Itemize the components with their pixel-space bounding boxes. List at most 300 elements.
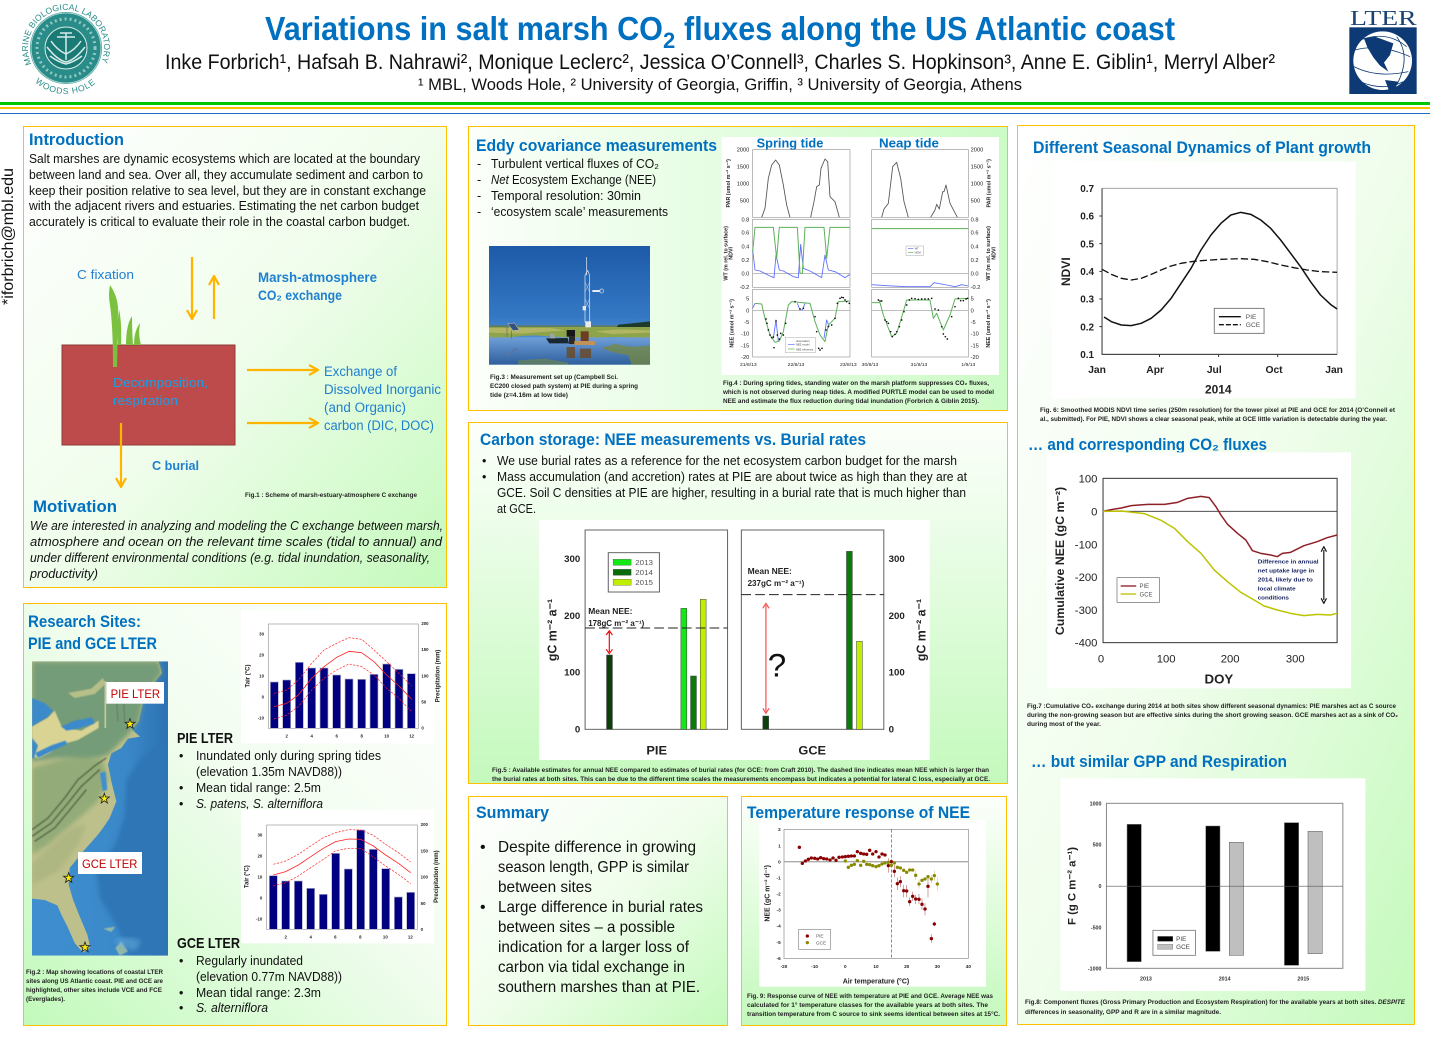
chart: GPP and respiration bars: 1000 bbox=[1090, 801, 1102, 807]
chart: spring and neap tide time series bbox=[722, 136, 999, 375]
heading: spring tide: Spring tide bbox=[757, 136, 823, 151]
list: summary points: between sites – a possible bbox=[498, 919, 675, 936]
list: eddy covariance facts: ‘ecosystem scale’ measurements bbox=[491, 205, 668, 219]
logo: LTER bbox=[1349, 8, 1417, 94]
label: GCE LTER bbox=[78, 852, 142, 874]
chart: spring and neap tide time series: 0.4 bbox=[741, 244, 749, 250]
text: motivation: under different environmental conditions (e.g. tidal inundation, seasonality, bbox=[30, 551, 430, 565]
heading: carbon storage: Carbon storage: NEE measurements vs. Burial rates bbox=[480, 431, 866, 449]
chart: GCE climate diagram: 200 bbox=[421, 822, 428, 827]
label: decomposition: respiration bbox=[113, 393, 178, 408]
caption: figure 3: Fig.3 : Measurement set up (Campbell Sci. bbox=[490, 374, 618, 381]
chart: GCE climate diagram: Precipitation (mm) bbox=[434, 850, 440, 903]
label: marsh-atmosphere exchange bbox=[258, 270, 377, 303]
text: GCE LTER site description: S. alterniflora bbox=[196, 1001, 268, 1015]
label: C burial: C burial bbox=[152, 458, 199, 473]
chart: NEE vs burial rates: 100 bbox=[889, 668, 905, 679]
chart: PIE climate diagram: 6 bbox=[335, 733, 338, 738]
chart: GPP and respiration bars: -1000 bbox=[1088, 966, 1102, 972]
label: decomposition bbox=[113, 375, 208, 408]
chart: spring and neap tide time series: WT (m rel. to surface) bbox=[986, 226, 992, 281]
icon: site stars bbox=[64, 719, 135, 952]
heading: CO2 fluxes: … and corresponding CO₂ fluxes bbox=[1028, 436, 1267, 454]
caption: figure 1: Fig.1 : Scheme of marsh-estuary-atmosphere C exchange bbox=[245, 492, 417, 499]
chart: spring and neap tide time series: -20 bbox=[741, 355, 749, 361]
authors: Inke Forbrich¹, Hafsah B. Nahrawi², Monique Leclerc², Jessica O’Connell³, Charles S. Hopkinson³, Anne E. Giblin¹, Merryl Alber² bbox=[165, 51, 1275, 74]
heading: research sites: PIE and GCE LTER bbox=[28, 635, 157, 653]
logo: LTER: LTER bbox=[1350, 8, 1417, 30]
chart: PIE climate diagram: 150 bbox=[421, 647, 429, 652]
chart: NDVI time series: Oct bbox=[1265, 365, 1283, 376]
chart: GCE climate diagram: 2 bbox=[284, 934, 287, 939]
heading: research sites: Research Sites: bbox=[28, 613, 141, 631]
list: summary points: indication for a larger loss of bbox=[498, 939, 690, 956]
caption: figure 8: differences in seasonality, GPP and R are in a similar magnitude. bbox=[1025, 1009, 1221, 1016]
chart: GCE climate diagram: 10 bbox=[258, 874, 263, 879]
caption: figure 7: during the non-growing season but are effective sinks during the short growing season. GCE marshes act as a sink of CO₂ bbox=[1027, 712, 1398, 719]
chart: cumulative NEE: -400 bbox=[1075, 638, 1097, 650]
logo: Marine Biological Laboratory seal bbox=[22, 4, 110, 94]
chart: NEE vs burial rates: 100 bbox=[564, 668, 580, 679]
legend: sites: PIE bbox=[1140, 584, 1149, 590]
caption: figure 9: calculated for 1° temperature classes for the available years at both sites. The bbox=[747, 1001, 988, 1009]
caption: figure 2 bbox=[26, 969, 163, 1003]
chart: cumulative NEE: DOY bbox=[1205, 672, 1233, 687]
chart: NEE vs air temperature: 0 bbox=[778, 859, 781, 864]
chart: NDVI time series: NDVI bbox=[1059, 257, 1073, 286]
text: introduction: with the adjacent rivers and estuaries. Estimating the net carbon budget bbox=[28, 199, 420, 213]
chart: spring and neap tide time series: 2000 bbox=[737, 148, 749, 154]
list: summary points: Despite difference in growing bbox=[498, 839, 696, 856]
text: PIE LTER site description: PIE LTER bbox=[177, 730, 233, 747]
chart: PIE climate diagram: 2 bbox=[285, 733, 288, 738]
label: dissolved carbon exchange: Exchange of bbox=[324, 364, 397, 379]
label: dissolved carbon exchange: carbon (DIC, DOC) bbox=[324, 418, 434, 433]
chart: NEE vs burial rates: GCE bbox=[798, 744, 826, 757]
chart: GCE climate diagram: 150 bbox=[421, 848, 428, 853]
list: eddy covariance facts: - bbox=[477, 189, 481, 203]
chart: spring and neap tide time series: NEE (umol m⁻² s⁻¹) bbox=[729, 299, 735, 348]
label: PIE mean NEE: Mean NEE: bbox=[588, 606, 632, 616]
annotation: difference in uptake: net uptake large in bbox=[1258, 568, 1314, 574]
chart: NDVI time series: 2014 bbox=[1205, 383, 1232, 397]
legend: time series: observation bbox=[796, 339, 810, 343]
chart: spring and neap tide time series: PAR (umol m⁻² s⁻¹) bbox=[987, 159, 993, 208]
list: summary points: carbon via tidal exchange in bbox=[498, 959, 685, 976]
label: marsh-atmosphere exchange: Marsh-atmosphere bbox=[258, 270, 377, 285]
chart: spring and neap tide time series: -15 bbox=[741, 343, 749, 349]
list: eddy covariance facts: - bbox=[477, 157, 481, 171]
chart: cumulative NEE: 200 bbox=[1221, 653, 1240, 665]
list: carbon storage facts: We use burial rates as a reference for the net ecosystem carbon budget for the marsh bbox=[497, 454, 957, 468]
legend: time series: WT bbox=[915, 247, 919, 251]
line: PIE NDVI bbox=[1104, 212, 1337, 326]
chart: NEE vs burial rates: 0 bbox=[889, 725, 894, 736]
chart: NEE vs burial rates: 300 bbox=[564, 554, 580, 565]
arrow: lateral export 2 bbox=[247, 418, 318, 428]
arrow: burial bbox=[116, 423, 126, 487]
chart: NEE vs air temperature: -6 bbox=[777, 956, 781, 961]
chart: NDVI time series: 0.4 bbox=[1080, 267, 1095, 278]
chart: spring and neap tide time series: 500 bbox=[971, 198, 980, 204]
heading: GPP and respiration: … but similar GPP and Respiration bbox=[1031, 753, 1287, 771]
chart: NEE vs air temperature: 10 bbox=[873, 964, 879, 969]
caption: figure 4: NEE and estimate the flux reduction during tidal inundation (Forbrich & Giblin 2015). bbox=[723, 398, 979, 405]
label: dissolved carbon exchange bbox=[324, 364, 441, 433]
panel: temperature response bbox=[742, 796, 1006, 1026]
chart: GCE climate diagram: 4 bbox=[309, 934, 312, 939]
list: carbon storage facts: at GCE. bbox=[497, 502, 536, 516]
label: GCE mean NEE: 237gC m⁻² a⁻¹) bbox=[748, 578, 804, 588]
chart: PIE climate diagram bbox=[241, 610, 441, 743]
caption: figure 6 bbox=[1040, 407, 1396, 423]
list: summary points: Large difference in burial rates bbox=[498, 899, 703, 916]
chart: NDVI time series: Jan bbox=[1325, 365, 1343, 376]
list: summary points: • bbox=[480, 899, 486, 916]
text: GCE LTER site description: (elevation 0.77m NAVD88)) bbox=[196, 970, 342, 984]
title: Variations in salt marsh CO bbox=[265, 10, 663, 47]
legend: sites: GCE bbox=[1176, 944, 1190, 951]
list: carbon storage facts bbox=[482, 454, 968, 516]
caption: figure 9: Fig. 9: Response curve of NEE with temperature at PIE and GCE. Average NEE was bbox=[747, 993, 993, 1000]
chart: NDVI time series: 0.3 bbox=[1080, 295, 1095, 306]
chart: GCE climate diagram: 10 bbox=[383, 934, 388, 939]
chart: NEE vs air temperature: 0 bbox=[844, 964, 847, 969]
chart: spring and neap tide time series: -10 bbox=[971, 332, 979, 338]
chart: PIE climate diagram: 10 bbox=[259, 673, 265, 678]
chart: NEE vs air temperature bbox=[759, 820, 986, 987]
bars: PIE bbox=[607, 599, 706, 729]
legend: sites bbox=[799, 929, 831, 949]
text: introduction: between land and sea. Over all, they accumulate sediment and carbon to bbox=[29, 168, 423, 182]
text: motivation bbox=[29, 519, 443, 581]
panel: carbon storage bbox=[468, 422, 1008, 784]
list: carbon storage facts: • bbox=[482, 470, 486, 484]
legend: years: 2015 bbox=[635, 578, 654, 587]
line: GCE NDVI bbox=[1102, 259, 1337, 280]
chart: GCE climate diagram: 100 bbox=[421, 875, 428, 880]
panel: introduction and motivation bbox=[24, 126, 446, 588]
caption: figure 2: highlighted, other sites include VCE and FCE bbox=[26, 987, 163, 994]
caption: figure 2: Fig.2 : Map showing locations of coastal LTER bbox=[26, 969, 163, 976]
caption: figure 3: EC200 closed path system) at PIE during a spring bbox=[490, 383, 638, 390]
chart: spring and neap tide time series: 1000 bbox=[737, 181, 749, 187]
chart: NEE vs burial rates: 300 bbox=[889, 554, 905, 565]
text: motivation: productivity) bbox=[29, 567, 98, 581]
text: GCE LTER site description: Regularly inundated bbox=[196, 954, 303, 968]
map: US Atlantic coast with LTER sites bbox=[32, 661, 168, 956]
chart: NEE vs air temperature: -3 bbox=[777, 908, 781, 913]
chart: NEE vs air temperature: 1 bbox=[778, 843, 781, 848]
icon: marsh grass bbox=[109, 285, 141, 367]
lakes region bbox=[32, 711, 99, 759]
heading: temperature response: Temperature response of NEE bbox=[747, 804, 970, 822]
chart: GCE climate diagram: 6 bbox=[334, 934, 337, 939]
caption: figure 7: during most of the year. bbox=[1027, 721, 1101, 728]
caption: figure 7 bbox=[1027, 703, 1398, 728]
chart: NEE vs air temperature: -2 bbox=[777, 892, 781, 897]
chart: spring and neap tide time series: PAR (umol m⁻² s⁻¹) bbox=[726, 159, 732, 208]
tower bbox=[585, 257, 590, 322]
chart: GPP and respiration bars: 2013 bbox=[1140, 976, 1152, 982]
chart: GCE climate diagram: -10 bbox=[256, 916, 263, 921]
islands bbox=[103, 927, 128, 956]
chart: spring and neap tide time series: 1000 bbox=[971, 181, 983, 187]
chart: GCE climate diagram: 20 bbox=[258, 853, 263, 858]
chart: spring and neap tide time series: -15 bbox=[971, 343, 979, 349]
chart: spring and neap tide time series: 0.6 bbox=[971, 231, 979, 237]
caption: figure 8: Fig.8: Component fluxes (Gross Primary Production and Ecosystem Respiration) for the available years at both sites. DESPITE bbox=[1025, 999, 1406, 1006]
label: decomposition: Decomposition, bbox=[113, 375, 208, 390]
chart: NEE vs burial rates: gC m⁻² a⁻¹ bbox=[914, 599, 929, 661]
text: introduction bbox=[28, 152, 426, 229]
annotation: difference in uptake: Difference in annual bbox=[1258, 559, 1319, 565]
caption: figure 2: sites along US Atlantic coast. PIE and GCE are bbox=[26, 978, 163, 985]
affiliations: ¹ MBL, Woods Hole, ² University of Georgia, Griffin, ³ University of Georgia, Athens bbox=[418, 75, 1022, 94]
heading: summary: Summary bbox=[476, 804, 550, 822]
chart: NEE vs air temperature: NEE (gC m⁻² d⁻¹) bbox=[764, 865, 771, 922]
chart: GCE climate diagram bbox=[241, 809, 440, 943]
bars: GCE bbox=[1229, 831, 1322, 955]
caption: figure 6: al., submitted). For PIE, NDVI shows a clear seasonal peak, while at GCE little variation is detectable during the year. bbox=[1040, 416, 1387, 423]
text: PIE LTER site description: • bbox=[179, 781, 183, 795]
legend: years: 2014 bbox=[635, 568, 654, 577]
list: summary points: season length, GPP is similar bbox=[498, 859, 690, 876]
chart: spring and neap tide time series: 0 bbox=[971, 308, 974, 314]
chart: cumulative NEE: -300 bbox=[1075, 605, 1097, 617]
chart: PIE climate diagram: 30 bbox=[259, 631, 265, 636]
caption: figure 9: transition temperature from C source to sink seems identical between sites at 15°C. bbox=[747, 1010, 1000, 1018]
legend: sites: PIE bbox=[1176, 936, 1186, 943]
label: PIE mean NEE bbox=[588, 606, 644, 628]
list: carbon storage facts: • bbox=[482, 454, 486, 468]
bars: PIE bbox=[1127, 823, 1299, 965]
line: GCE cumulative NEE bbox=[1103, 511, 1337, 616]
chart: spring and neap tide time series: 0.6 bbox=[741, 231, 749, 237]
chart: GCE climate diagram: 30 bbox=[258, 832, 263, 837]
list: carbon storage facts: Mass accumulation (and accretion) rates at PIE are about twice as high than they are at bbox=[497, 470, 968, 484]
caption: figure 5: Fig.5 : Available estimates for annual NEE compared to estimates of burial rates (for GCE: from Craft 2010). The dashed line indicates mean NEE which is larger than bbox=[492, 767, 989, 774]
chart: NEE vs burial rates: gC m⁻² a⁻¹ bbox=[545, 599, 559, 661]
text: GCE LTER site description bbox=[177, 935, 342, 1015]
chart: NEE vs air temperature: 40 bbox=[966, 964, 971, 969]
caption: figure 8 bbox=[1025, 999, 1406, 1016]
chart: GCE climate diagram: 8 bbox=[359, 934, 362, 939]
annotation: difference in uptake bbox=[1258, 559, 1319, 601]
list: eddy covariance facts bbox=[477, 157, 668, 219]
arrow: CO2 up bbox=[209, 276, 219, 319]
title: fluxes along the US Atlantic coast bbox=[684, 10, 1175, 47]
chart: spring and neap tide time series: -10 bbox=[741, 332, 749, 338]
legend: time series: NEE model bbox=[796, 343, 810, 347]
label: PIE mean NEE: 178gC m⁻² a⁻¹) bbox=[588, 618, 644, 628]
chart: PIE climate diagram: 12 bbox=[409, 733, 415, 738]
caption: figure 7: Fig.7 :Cumulative CO₂ exchange during 2014 at both sites show different seasonal dynamics: PIE marshes act as C source bbox=[1027, 703, 1396, 710]
text: PIE LTER site description: Mean tidal range: 2.5m bbox=[196, 781, 321, 795]
arrow: GCE difference bbox=[763, 603, 769, 713]
text: PIE LTER site description: • bbox=[179, 797, 183, 811]
text: PIE LTER site description: • bbox=[179, 749, 183, 763]
chart: spring and neap tide time series: -20 bbox=[971, 355, 979, 361]
boat and platform bbox=[546, 338, 569, 343]
chart: GCE climate diagram: Tair (°C) bbox=[244, 865, 250, 888]
chart: spring and neap tide time series: NEE (umol m⁻² s⁻¹) bbox=[986, 299, 992, 348]
legend: sites: GCE bbox=[816, 940, 826, 945]
arrow: PIE difference bbox=[606, 631, 612, 654]
chart: GPP and respiration bars bbox=[1061, 778, 1365, 991]
annotation: difference in uptake: 2014, likely due to bbox=[1258, 577, 1314, 583]
chart: spring and neap tide time series: 23/8/13 bbox=[840, 362, 857, 368]
chart: cumulative NEE: Cumulative NEE (gC m⁻²) bbox=[1053, 487, 1067, 635]
chart: NEE vs burial rates: 200 bbox=[564, 611, 580, 622]
text: introduction: Salt marshes are dynamic ecosystems which are located at the boundary bbox=[29, 152, 421, 166]
text: GCE LTER site description: • bbox=[179, 986, 183, 1000]
label: dissolved carbon exchange: (and Organic) bbox=[324, 400, 406, 415]
chart: spring and neap tide time series: NDVI bbox=[729, 246, 735, 260]
chart: NEE vs air temperature: -20 bbox=[781, 964, 788, 969]
heading: seasonal dynamics: Different Seasonal Dynamics of Plant growth bbox=[1033, 139, 1371, 157]
panel: seasonal dynamics column bbox=[1018, 126, 1414, 1024]
text: PIE LTER site description bbox=[177, 730, 381, 811]
chart: PIE climate diagram: 4 bbox=[310, 733, 313, 738]
caption: figure 5 bbox=[492, 767, 990, 783]
legend: time series: NDVI bbox=[915, 250, 921, 254]
chart: spring and neap tide time series: 0.4 bbox=[971, 244, 979, 250]
chart: NDVI time series bbox=[1052, 162, 1356, 398]
text: GCE LTER site description: • bbox=[179, 1001, 183, 1015]
panel: eddy covariance measurements bbox=[468, 126, 1008, 410]
caption: figure 3 bbox=[490, 374, 638, 399]
caption: figure 6: Fig. 6: Smoothed MODIS NDVI time series (250m resolution) for the tower pixel at PIE and GCE for 2014 (O’Connell et bbox=[1040, 407, 1396, 414]
label: GCE mean NEE: Mean NEE: bbox=[748, 566, 792, 576]
Appalachian ridges bbox=[32, 758, 106, 841]
arrow: CO2 down bbox=[187, 257, 197, 319]
chart: NEE vs air temperature: Air temperature (°C) bbox=[843, 977, 909, 985]
chart: NDVI time series: Jul bbox=[1207, 365, 1222, 376]
caption: figure 4 bbox=[722, 380, 994, 405]
logo: Marine Biological Laboratory seal: WOODS HOLE bbox=[36, 78, 96, 94]
chart: spring and neap tide time series: -5 bbox=[971, 320, 976, 326]
ocean shelf edge bbox=[96, 736, 168, 956]
chart: spring and neap tide time series: 21/8/13 bbox=[740, 362, 757, 368]
chart: PIE climate diagram: 20 bbox=[259, 652, 265, 657]
bars: GCE bbox=[763, 551, 862, 729]
chart: cumulative NEE bbox=[1047, 452, 1351, 688]
chart: PIE climate diagram: Tair (°C) bbox=[245, 665, 251, 687]
question mark: ? bbox=[768, 647, 786, 684]
chart: GPP and respiration bars: F (g C m⁻² a⁻¹) bbox=[1067, 847, 1079, 925]
panel: summary bbox=[468, 796, 728, 1026]
chart: spring and neap tide time series: 1/9/13 bbox=[961, 362, 975, 368]
chart: spring and neap tide time series: 0.2 bbox=[741, 258, 749, 264]
chart: cumulative NEE: 100 bbox=[1079, 473, 1097, 485]
chart: spring and neap tide time series: -0.2 bbox=[971, 285, 980, 291]
chart: NEE vs air temperature: 2 bbox=[778, 827, 781, 832]
heading: neap tide: Neap tide bbox=[879, 136, 939, 151]
text: GCE LTER site description: • bbox=[179, 954, 183, 968]
legend: sites bbox=[1214, 308, 1264, 333]
Chesapeake bay bbox=[100, 771, 107, 791]
title: 2 bbox=[663, 28, 675, 53]
land mass bbox=[32, 661, 162, 953]
chart: spring and neap tide time series: 5 bbox=[971, 297, 974, 303]
legend: sites: PIE bbox=[816, 934, 824, 939]
title bbox=[265, 10, 1175, 53]
chart: NEE vs air temperature: 20 bbox=[904, 964, 910, 969]
chart: GPP and respiration bars: 500 bbox=[1093, 843, 1102, 849]
list: summary points: between sites bbox=[498, 879, 592, 896]
chart: spring and neap tide time series: -5 bbox=[744, 320, 749, 326]
text: motivation: atmosphere and ocean on the relevant time scales (tidal to annual) and bbox=[30, 535, 443, 549]
chart: GPP and respiration bars: 2014 bbox=[1219, 976, 1231, 982]
chart: spring and neap tide time series: 0.8 bbox=[971, 217, 979, 223]
chart: NEE vs air temperature: -10 bbox=[811, 964, 818, 969]
annotation: difference in uptake: local climate bbox=[1258, 586, 1296, 592]
list: carbon storage facts: GCE. Soil C densities at PIE are higher, resulting in a burial rate that is much higher than bbox=[497, 486, 966, 500]
heading: introduction: Introduction bbox=[29, 131, 124, 149]
chart: spring and neap tide time series: 500 bbox=[740, 198, 749, 204]
label: PIE LTER: PIE LTER bbox=[111, 687, 160, 701]
chart: cumulative NEE: 0 bbox=[1098, 653, 1104, 665]
list: eddy covariance facts: Temporal resolution: 30min bbox=[491, 189, 641, 203]
chart: spring and neap tide time series: 0.0 bbox=[971, 271, 979, 277]
caption: figure 4: Fig.4 : During spring tides, standing water on the marsh platform suppresses CO₂ fluxes, bbox=[723, 380, 989, 387]
panel: research sites bbox=[24, 604, 446, 1026]
legend: sites bbox=[1153, 930, 1195, 955]
header bbox=[22, 4, 1417, 94]
chart: GPP and respiration bars: -500 bbox=[1091, 925, 1102, 931]
chart: spring and neap tide time series: 30/8/13 bbox=[862, 362, 879, 368]
caption: figure 3: tide (z=4.16m at low tide) bbox=[490, 392, 568, 399]
label: GCE LTER: GCE LTER bbox=[82, 857, 138, 871]
text: GCE LTER site description: GCE LTER bbox=[177, 935, 240, 952]
mean NEE lines bbox=[585, 595, 884, 628]
legend: years bbox=[608, 553, 659, 592]
chart: NDVI time series: 0.7 bbox=[1080, 184, 1095, 195]
chart: PIE climate diagram: -10 bbox=[258, 715, 265, 720]
chart: spring and neap tide time series: 0.2 bbox=[971, 258, 979, 264]
chart: spring and neap tide time series: 1500 bbox=[971, 164, 983, 170]
contact email: *iforbrich@mbl.edu bbox=[0, 168, 17, 305]
legend: sites bbox=[1117, 578, 1159, 602]
legend: sites: GCE bbox=[1246, 322, 1261, 329]
chart: NDVI time series: 0.2 bbox=[1080, 322, 1095, 333]
line: PIE cumulative NEE bbox=[1103, 496, 1337, 557]
chart: PIE climate diagram: 200 bbox=[421, 621, 429, 626]
chart: cumulative NEE: 100 bbox=[1157, 653, 1176, 665]
caption: figure 4: which is not observed during neap tides. A modified PURTLE model can be used to model bbox=[722, 389, 994, 396]
label: GCE mean NEE bbox=[748, 566, 804, 588]
chart: PIE climate diagram: 0 bbox=[262, 694, 265, 699]
list: eddy covariance facts: Net Ecosystem Exchange (NEE) bbox=[491, 173, 656, 187]
arrow: annual uptake difference bbox=[1321, 547, 1326, 603]
logo: Marine Biological Laboratory seal: MARINE BIOLOGICAL LABORATORY bbox=[22, 4, 110, 66]
caption: figure 5: the burial rates at both sites. This can be due to the different time scales the measurements encompass but indicates a potential for lateral C loss, especially at GCE. bbox=[492, 776, 990, 783]
chart: spring and neap tide time series: 5 bbox=[746, 297, 749, 303]
chart: NEE vs burial rates: 200 bbox=[889, 611, 905, 622]
heading: research sites bbox=[28, 613, 157, 653]
chart: spring and neap tide time series: 31/8/13 bbox=[911, 362, 928, 368]
diagram: marsh carbon exchange scheme bbox=[62, 257, 441, 487]
chart: GCE climate diagram: 12 bbox=[408, 934, 413, 939]
solar panel bbox=[508, 323, 519, 331]
chart: GPP and respiration bars: 0 bbox=[1099, 884, 1102, 890]
chart: PIE climate diagram: 8 bbox=[360, 733, 363, 738]
chart: NEE vs burial rates: 0 bbox=[575, 725, 580, 736]
list: eddy covariance facts: - bbox=[477, 173, 481, 187]
chart: NEE vs air temperature: -4 bbox=[777, 924, 781, 929]
chart: PIE climate diagram: Precipitation (mm) bbox=[435, 650, 441, 702]
